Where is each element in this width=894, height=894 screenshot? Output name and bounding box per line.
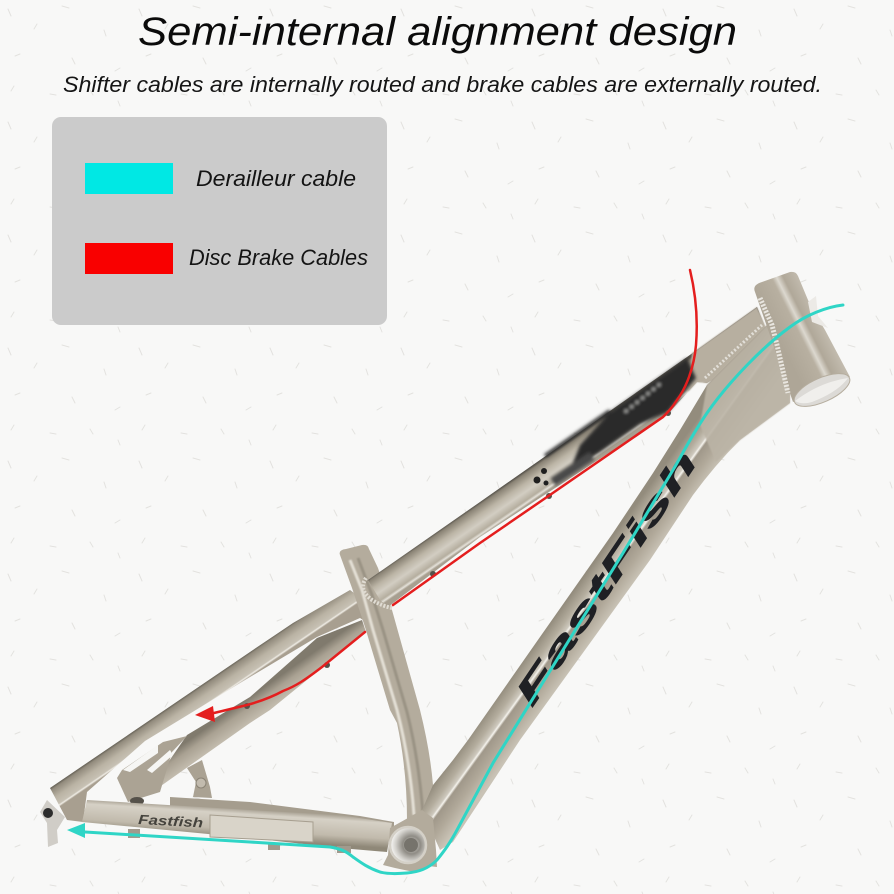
chainstay logo: Fastfish [138, 812, 204, 830]
chainstay [82, 800, 392, 852]
disc brake cable route [195, 270, 697, 722]
head tube [754, 272, 850, 402]
cable guides [244, 410, 671, 709]
top tube to down tube weld [705, 325, 762, 378]
chainstay cable guides [128, 829, 351, 853]
panel: legend [52, 117, 387, 325]
seat cluster weld [363, 578, 392, 608]
bridge slot [147, 750, 173, 773]
red arrowhead [195, 706, 215, 722]
brake bridge [117, 736, 187, 802]
seat tube [340, 545, 433, 822]
inner seat stay [145, 620, 366, 796]
top tube emblem [534, 468, 548, 486]
inner chainstay [170, 797, 394, 830]
cyan arrowhead [67, 823, 85, 838]
bridge window [123, 745, 158, 772]
down tube head joint [700, 325, 790, 462]
chainstay yoke [210, 815, 313, 842]
top tube [368, 307, 773, 607]
legend label: disc brake cables: Disc Brake Cables [189, 245, 368, 270]
derailleur cable route [67, 305, 843, 874]
weld seam [760, 298, 788, 393]
outer seat stay [50, 590, 366, 822]
legend label: derailleur cable: Derailleur cable [196, 166, 356, 191]
head tube lower bore [790, 367, 854, 413]
bridge eyelet [130, 797, 144, 805]
legend swatch: derailleur cable [85, 163, 173, 194]
down tube [422, 325, 790, 850]
frame decal smudge [545, 358, 696, 482]
head tube cable port [808, 296, 828, 328]
disc mount [187, 760, 212, 798]
top tube head end [688, 307, 773, 392]
bike frame [40, 272, 854, 872]
legend swatch: disc brake cables [85, 243, 173, 274]
bottom bracket shell [383, 810, 437, 872]
down tube logo: FastFish [507, 444, 704, 712]
subtitle: Shifter cables are internally routed and brake cables are externally routed. [63, 72, 822, 97]
rear dropout [40, 800, 65, 847]
title: Semi-internal alignment design [138, 10, 737, 54]
